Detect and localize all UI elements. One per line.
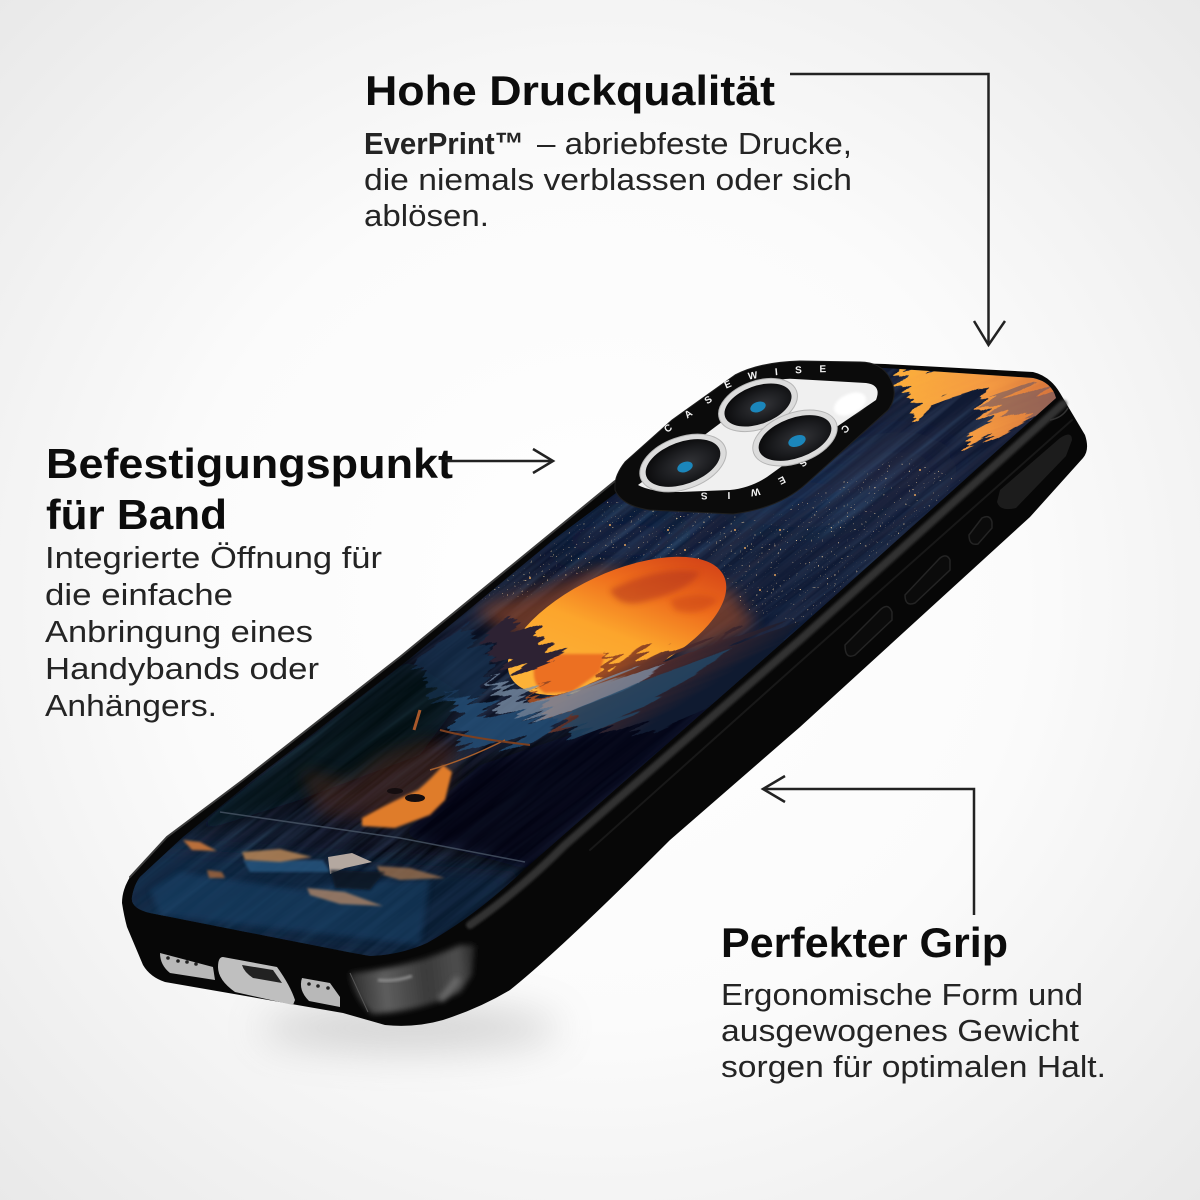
haze behind moon xyxy=(475,568,755,650)
body text xyxy=(721,977,1106,1084)
lens plate xyxy=(638,379,878,492)
phone shadow xyxy=(260,1006,560,1050)
body text: sorgen für optimalen Halt. xyxy=(721,1049,1106,1084)
body text: Anhängers. xyxy=(45,688,217,723)
corner gloss xyxy=(350,945,475,1014)
phone case xyxy=(122,322,1088,1026)
brand text bottom xyxy=(701,426,849,500)
arrow: strap attachment xyxy=(445,449,553,473)
lens 2 xyxy=(745,399,845,477)
heading: Befestigungspunkt xyxy=(46,440,453,487)
horizon line xyxy=(220,812,525,862)
callout: strap attachment xyxy=(45,440,453,723)
body text xyxy=(45,540,382,723)
lake base xyxy=(133,848,520,956)
camera ring xyxy=(615,361,894,514)
body text: EverPrint™ xyxy=(364,126,524,161)
sunset sky corner xyxy=(898,366,1065,447)
lens 1 xyxy=(711,368,805,442)
fire patch xyxy=(300,710,530,828)
tree line over moon xyxy=(533,620,800,730)
body text: Ergonomische Form und xyxy=(721,977,1083,1012)
body text: Handybands oder xyxy=(45,651,319,686)
printed artwork xyxy=(132,368,1056,956)
lake reflections xyxy=(150,840,445,945)
speaker right xyxy=(301,978,340,1007)
left tree cluster xyxy=(488,617,561,672)
blue mist swirl xyxy=(415,625,730,745)
moon xyxy=(508,556,726,696)
body text xyxy=(364,126,852,233)
speaker left xyxy=(160,953,215,980)
heading xyxy=(46,440,453,538)
callout: grip xyxy=(721,919,1106,1084)
heading: für Band xyxy=(46,491,227,538)
speckled stars xyxy=(482,456,960,625)
arrow: grip xyxy=(763,776,974,915)
body text: die niemals verblassen oder sich xyxy=(364,162,852,197)
side rim highlight xyxy=(130,404,1072,925)
arrow: print quality xyxy=(790,74,1005,345)
side buttons xyxy=(845,408,1072,656)
heading: Perfekter Grip xyxy=(721,919,1008,966)
dark lower shadows xyxy=(183,660,760,870)
body text: die einfache xyxy=(45,577,233,612)
body text: – abriebfeste Drucke, xyxy=(537,126,852,161)
body text: Anbringung eines xyxy=(45,614,313,649)
USB port xyxy=(218,957,295,1005)
brand text top: CASEWISE xyxy=(664,365,826,432)
callout: print quality xyxy=(364,67,852,233)
night clouds xyxy=(576,460,926,558)
body text: Integrierte Öffnung für xyxy=(45,540,382,575)
camera island xyxy=(614,360,895,514)
painterly streaks xyxy=(132,368,1048,956)
body text: ablösen. xyxy=(364,198,489,233)
flash xyxy=(830,388,870,420)
bottom ports xyxy=(160,953,340,1007)
heading: Hohe Druckqualität xyxy=(365,67,775,114)
body text: ausgewogenes Gewicht xyxy=(721,1013,1079,1048)
manual stars xyxy=(529,469,921,591)
case body xyxy=(122,362,1087,1026)
lens 3 xyxy=(632,423,734,503)
jagged landscape layers xyxy=(410,369,1056,752)
